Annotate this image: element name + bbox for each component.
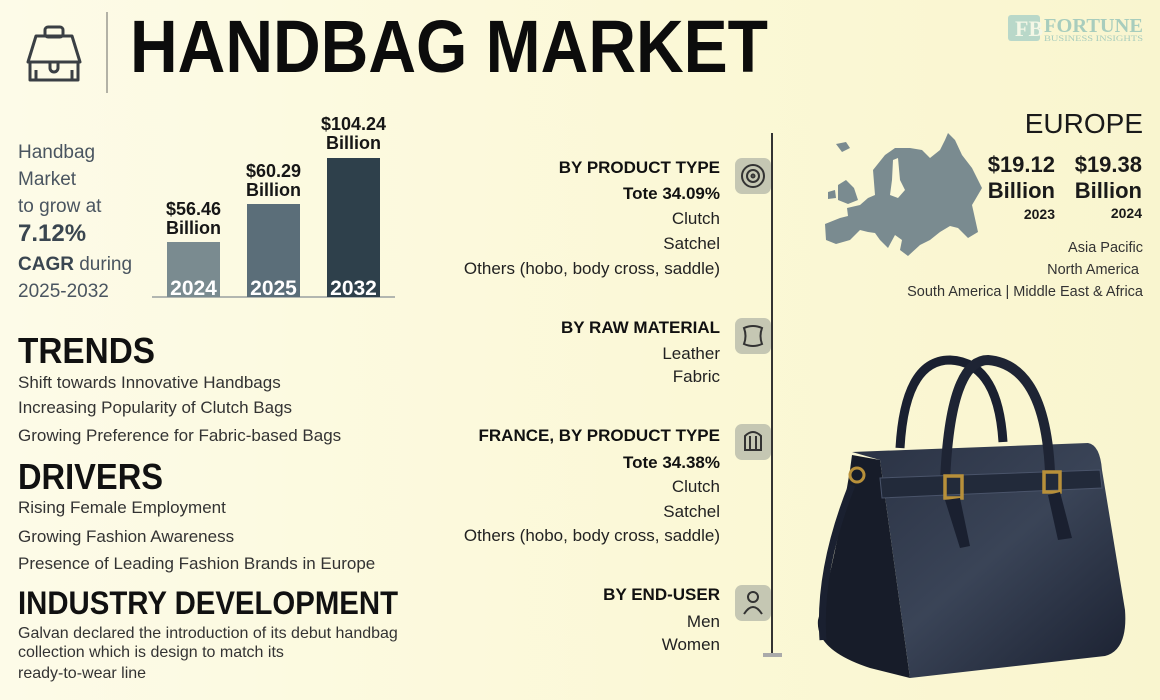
stats: europe: $19.38	[1075, 152, 1142, 177]
bar chart: Billion	[246, 180, 301, 200]
segment: by product type: BY PRODUCT TYPE	[559, 158, 720, 177]
text: industry development	[18, 625, 398, 682]
text: industry development: Galvan declared the introduction of its debut handbag	[18, 625, 398, 642]
stats: europe: 2023	[1024, 206, 1055, 222]
icon: handbag header	[28, 27, 80, 80]
list: trends: Growing Preference for Fabric-based Bags	[18, 426, 341, 445]
bar chart: 2032	[330, 277, 377, 300]
logo: BUSINESS INSIGHTS	[1044, 33, 1143, 43]
segment: by raw material: Leather	[662, 344, 720, 363]
icons: segments	[735, 158, 771, 621]
heading: europe: EUROPE	[1025, 108, 1143, 139]
bar chart: $56.46	[166, 199, 221, 219]
text: industry development: collection which is design to match its	[18, 644, 284, 661]
text block: CAGR: 2025-2032	[18, 281, 109, 302]
logo: FB	[1015, 16, 1043, 41]
segment: end user	[603, 585, 720, 654]
segment: by product type: Tote 34.09%	[623, 184, 720, 203]
segment: france: Clutch	[672, 477, 720, 496]
regions list	[907, 240, 1144, 300]
segment: end user: Men	[687, 612, 720, 631]
segment: france: Satchel	[663, 502, 720, 521]
list: drivers: Growing Fashion Awareness	[18, 527, 234, 546]
list: drivers	[18, 498, 375, 573]
segment: by product type: Satchel	[663, 234, 720, 253]
text block: CAGR: Market	[18, 169, 77, 190]
stats: europe: Billion	[1075, 178, 1142, 203]
segment: france: Others (hobo, body cross, saddle)	[464, 526, 720, 545]
logo: FORTUNE	[1044, 15, 1143, 37]
stats: europe	[988, 152, 1142, 222]
text block: CAGR: CAGR during	[18, 254, 132, 275]
list: drivers: Presence of Leading Fashion Brands in Europe	[18, 554, 375, 573]
segment: by product type	[464, 158, 720, 278]
segment: end user: Women	[662, 635, 720, 654]
bar chart: $60.29	[246, 161, 301, 181]
bar chart: Billion	[326, 133, 381, 153]
list: trends	[18, 373, 341, 445]
segment: france: Tote 34.38%	[623, 453, 720, 472]
segment: by product type: Others (hobo, body cross, saddle)	[464, 259, 720, 278]
segment: france	[464, 426, 720, 545]
heading: drivers: DRIVERS	[18, 456, 163, 497]
text: industry development: ready-to-wear line	[18, 665, 146, 682]
heading: industry development: INDUSTRY DEVELOPMENT	[18, 585, 398, 621]
regions list: Asia Pacific	[1068, 240, 1143, 256]
stats: europe: Billion	[988, 178, 1055, 203]
segment: by raw material: Fabric	[673, 367, 720, 386]
stats: europe: $19.12	[988, 152, 1055, 177]
illustration: handbag	[818, 360, 1125, 678]
regions list: North America	[1047, 262, 1140, 278]
regions list: South America | Middle East & Africa	[907, 284, 1144, 300]
text block: CAGR	[18, 142, 132, 302]
logo	[1008, 15, 1143, 43]
bar chart	[152, 114, 395, 300]
segment: france: FRANCE, BY PRODUCT TYPE	[478, 426, 720, 445]
stats: europe: 2024	[1111, 205, 1142, 221]
title: HANDBAG MARKET	[130, 5, 768, 88]
map: europe	[825, 133, 982, 256]
timeline line	[763, 133, 782, 657]
list: drivers: Rising Female Employment	[18, 498, 226, 517]
heading: trends: TRENDS	[18, 330, 155, 371]
list: trends: Shift towards Innovative Handbags	[18, 373, 281, 392]
text block: CAGR: to grow at	[18, 196, 102, 217]
bar chart: 2025	[250, 277, 297, 300]
segment: by raw material: BY RAW MATERIAL	[561, 318, 720, 337]
segment: end user: BY END-USER	[603, 585, 720, 604]
bar chart: $104.24	[321, 114, 386, 134]
bar chart: Billion	[166, 218, 221, 238]
text block: CAGR: Handbag	[18, 142, 95, 163]
segment: by product type: Clutch	[672, 209, 720, 228]
text block: CAGR: 7.12%	[18, 220, 86, 247]
segment: by raw material	[561, 318, 720, 386]
bar chart: 2024	[170, 277, 217, 300]
list: trends: Increasing Popularity of Clutch Bags	[18, 398, 292, 417]
